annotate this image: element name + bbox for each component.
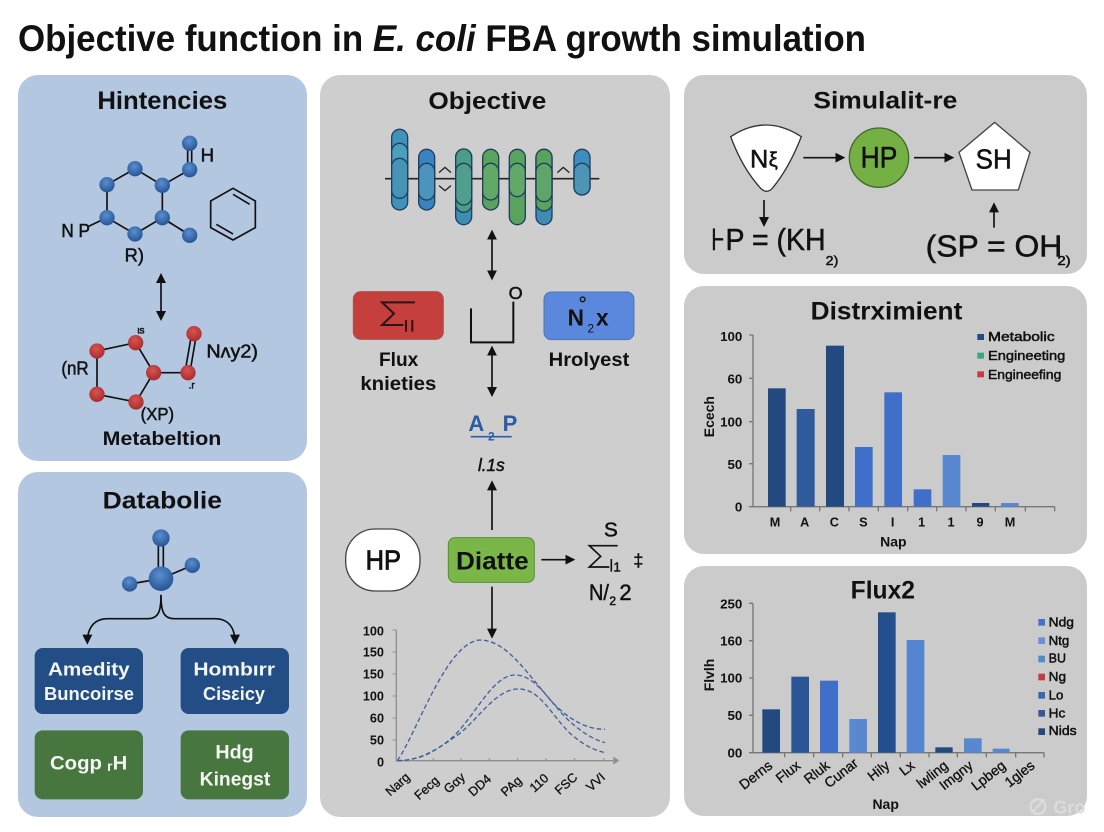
chart x labels: Narg bbox=[383, 770, 413, 799]
legend: Engineefing bbox=[988, 367, 1061, 382]
icon: red molecule bbox=[61, 326, 258, 424]
x tick labels: Lpbeg bbox=[968, 757, 1009, 794]
chart axes bbox=[749, 603, 1044, 757]
legend: Ng bbox=[1049, 669, 1066, 684]
y tick labels: 00 bbox=[728, 745, 742, 760]
chart axes bbox=[749, 335, 1055, 511]
box: Cogp H bbox=[35, 730, 143, 799]
x tick labels: Rluk bbox=[801, 756, 833, 787]
panel: Flux2 bar chart bbox=[684, 566, 1087, 817]
icon: membrane proteins bbox=[385, 129, 599, 225]
label: A2P: 2 bbox=[488, 429, 495, 443]
box: Hdg Kinegst bbox=[181, 730, 289, 799]
y tick labels bbox=[720, 596, 742, 760]
heading: Hintencies: Hintencies bbox=[97, 88, 227, 115]
formula: SP = OH2: (SP = OH bbox=[926, 230, 1062, 264]
x tick labels bbox=[770, 516, 1015, 530]
node: HP circle bbox=[849, 128, 909, 187]
y tick labels: 50 bbox=[728, 708, 742, 723]
formula: sigma: 2 bbox=[609, 594, 616, 608]
legend: Engineeting bbox=[988, 348, 1065, 363]
x tick labels: Imgny bbox=[936, 757, 976, 793]
chart axis labels: 0 bbox=[377, 756, 384, 770]
box: sigma red bbox=[353, 292, 443, 339]
x tick labels: C bbox=[830, 516, 839, 530]
x tick labels: 1gles bbox=[1001, 757, 1038, 790]
chart axis labels: 150 bbox=[363, 646, 384, 660]
label: A2P: P bbox=[503, 411, 517, 436]
icon: bracket with O: O bbox=[509, 283, 523, 303]
y axis title: Ecech bbox=[701, 396, 717, 437]
chart x labels: 110 bbox=[527, 771, 551, 795]
label: Hrolyest: Hrolyest bbox=[549, 350, 630, 371]
box: Hombirr Cisicy: Cisεicy bbox=[203, 683, 266, 704]
chart x labels: PAg bbox=[498, 773, 525, 799]
label: Metabeltion: Metabeltion bbox=[103, 429, 221, 450]
label: Flux knieties: Flux bbox=[379, 350, 419, 371]
chart x labels: VVI bbox=[583, 770, 608, 794]
legend: Ndg bbox=[1049, 615, 1074, 630]
y tick labels: 100 bbox=[720, 671, 742, 686]
panel: Databolie bbox=[18, 472, 307, 817]
legend: Hc bbox=[1049, 705, 1066, 720]
box: N2x blue: 2 bbox=[587, 321, 594, 335]
node: HP bbox=[346, 529, 420, 591]
x tick labels: 9 bbox=[976, 516, 984, 530]
arrow: Diatte to chart bbox=[489, 587, 494, 637]
icon: central molecule bbox=[122, 529, 200, 592]
arrow: two-way top bbox=[489, 232, 494, 278]
icon: red molecule: (XP) bbox=[141, 404, 174, 424]
box: Amedity Buncoirse bbox=[35, 648, 143, 714]
icon: red molecule: Nᴧy2) bbox=[206, 341, 258, 362]
formula: SP = OH2: 2) bbox=[1057, 253, 1071, 268]
box: N2x blue: x bbox=[596, 305, 609, 331]
label: Flux knieties bbox=[360, 350, 436, 395]
box: Cogp H: Cogp ᵣH bbox=[50, 753, 127, 774]
chart x labels: Gαy bbox=[441, 770, 468, 796]
panel: Hintencies bbox=[18, 75, 307, 461]
x tick labels: 1 bbox=[947, 516, 955, 530]
x tick labels: S bbox=[859, 516, 868, 530]
icon: blue molecule: H bbox=[201, 145, 214, 166]
node: Diatte: Diatte bbox=[456, 549, 529, 576]
y tick labels: 50 bbox=[728, 457, 742, 472]
y axis title: Flvlh bbox=[701, 659, 717, 691]
chart x labels: DD4 bbox=[466, 772, 494, 799]
node: N shape bbox=[731, 125, 801, 191]
chart curves bbox=[397, 640, 605, 761]
legend: Lo bbox=[1049, 687, 1063, 702]
watermark: Gro bbox=[1053, 796, 1085, 817]
label: l.1s: l.1s bbox=[478, 455, 505, 475]
node: Diatte bbox=[448, 538, 534, 582]
box: Amedity Buncoirse: Buncoirse bbox=[44, 683, 134, 704]
y tick labels: 250 bbox=[720, 596, 742, 611]
legend bbox=[1038, 615, 1077, 738]
formula: sigma bbox=[589, 519, 643, 608]
icon: bracket with O bbox=[471, 283, 523, 342]
formula: sigma: 2 bbox=[619, 580, 632, 605]
heading: Simulalit-re: Simulalit-re bbox=[813, 87, 957, 114]
legend: Metabolic bbox=[988, 329, 1055, 344]
icon: red molecule: .r bbox=[189, 380, 195, 391]
arrow: split to boxes bbox=[87, 595, 161, 643]
x tick labels: M bbox=[1005, 516, 1015, 530]
node: SH pentagon: SH bbox=[976, 143, 1012, 174]
chart x labels bbox=[383, 770, 608, 803]
x tick labels bbox=[736, 755, 1038, 794]
title: Objective function in E. coli FBA growth simulation bbox=[18, 18, 866, 59]
x tick labels: Flux bbox=[773, 757, 803, 786]
chart axis labels: 100 bbox=[363, 624, 384, 638]
panel: Distrximient bar chart bbox=[684, 286, 1087, 554]
arrow: N to HP bbox=[803, 155, 843, 160]
watermark bbox=[1031, 796, 1085, 817]
icon: blue molecule: R) bbox=[125, 245, 144, 266]
x tick labels: 1 bbox=[918, 516, 925, 530]
arrow: HP to SH bbox=[914, 155, 952, 160]
formula: sigma: S bbox=[604, 519, 618, 542]
label: A2P bbox=[468, 411, 517, 443]
y tick labels: 160 bbox=[720, 634, 742, 649]
y tick labels bbox=[720, 329, 742, 515]
x axis title: Nap bbox=[872, 796, 899, 812]
line chart bbox=[363, 624, 619, 803]
node: SH pentagon bbox=[959, 122, 1030, 190]
icon: blue molecule bbox=[61, 136, 214, 266]
x tick labels: M bbox=[770, 516, 780, 530]
icon: blue molecule: N P bbox=[61, 220, 90, 241]
box: N2x blue: N bbox=[568, 305, 584, 331]
chart axis labels: 150 bbox=[363, 668, 384, 682]
x tick labels: lwling bbox=[913, 757, 951, 791]
label: A2P: A bbox=[468, 411, 484, 436]
y tick labels: 100 bbox=[720, 415, 742, 430]
formula: sigma: ‡ bbox=[633, 551, 643, 571]
formula: sigma: N/ bbox=[589, 580, 610, 605]
arrow: two-way middle bbox=[489, 348, 494, 395]
bars bbox=[768, 346, 1019, 507]
chart axis labels: 50 bbox=[370, 734, 384, 748]
legend: Ntg bbox=[1049, 633, 1069, 648]
formula: HP = KH2: ⊦P = (KH bbox=[711, 223, 826, 257]
box: Hdg Kinegst: Kinegst bbox=[200, 769, 271, 790]
node: HP: HP bbox=[366, 545, 401, 576]
node: N shape: ξ bbox=[769, 149, 778, 172]
box: N2x blue bbox=[544, 292, 634, 340]
icon: red molecule: (nR bbox=[61, 357, 89, 378]
box: Hdg Kinegst: Hdg bbox=[215, 743, 254, 764]
heading: Databolie: Databolie bbox=[103, 488, 222, 515]
label: Flux knieties: knieties bbox=[360, 374, 436, 395]
panel: Objective bbox=[320, 75, 670, 817]
x tick labels: I bbox=[891, 516, 894, 530]
formula: sigma: 1 bbox=[613, 560, 621, 575]
node: N shape: N bbox=[750, 146, 768, 174]
arrow: two-way bbox=[158, 275, 163, 319]
bars bbox=[762, 612, 1010, 753]
arrow: down to formula bbox=[761, 200, 766, 225]
box: Hombirr Cisicy bbox=[181, 648, 289, 714]
x tick labels: Lx bbox=[896, 757, 918, 779]
arrow: up from Diatte bbox=[489, 482, 494, 530]
x axis title: Nap bbox=[880, 534, 907, 550]
legend: Nids bbox=[1049, 723, 1077, 738]
x tick labels: A bbox=[800, 516, 809, 530]
chart x labels: Fecg bbox=[412, 773, 442, 803]
node: HP circle: HP bbox=[861, 142, 897, 175]
arrow: split to boxes right bbox=[161, 595, 235, 643]
heading: Distrximient: Distrximient bbox=[811, 298, 962, 325]
box: Hombirr Cisicy: Hombırr bbox=[193, 658, 275, 679]
icon: hexagon ring bbox=[211, 188, 255, 240]
arrow: up from formula bbox=[991, 204, 996, 228]
legend bbox=[977, 329, 1065, 382]
heading: Flux2: Flux2 bbox=[851, 577, 915, 604]
x tick labels: Hily bbox=[864, 757, 893, 784]
formula: HP = KH2: 2) bbox=[826, 253, 838, 268]
x tick labels: Cunar bbox=[821, 755, 861, 791]
box: Amedity Buncoirse: Amedity bbox=[48, 658, 130, 679]
x tick labels: Derns bbox=[736, 757, 775, 793]
y tick labels: 0 bbox=[735, 500, 742, 515]
chart x labels: FSC bbox=[552, 770, 580, 797]
heading: Objective: Objective bbox=[428, 88, 546, 115]
chart axis labels: 100 bbox=[363, 690, 384, 704]
legend: BU bbox=[1049, 651, 1066, 666]
y tick labels: 100 bbox=[720, 329, 742, 344]
chart axis labels: 60 bbox=[370, 712, 384, 726]
chart axis labels bbox=[363, 624, 384, 770]
icon: red molecule: ιs bbox=[137, 326, 145, 337]
panel: Simulalit-re bbox=[684, 75, 1087, 274]
y tick labels: 60 bbox=[728, 371, 742, 386]
arrow: Diatte to sigma bbox=[541, 557, 573, 562]
